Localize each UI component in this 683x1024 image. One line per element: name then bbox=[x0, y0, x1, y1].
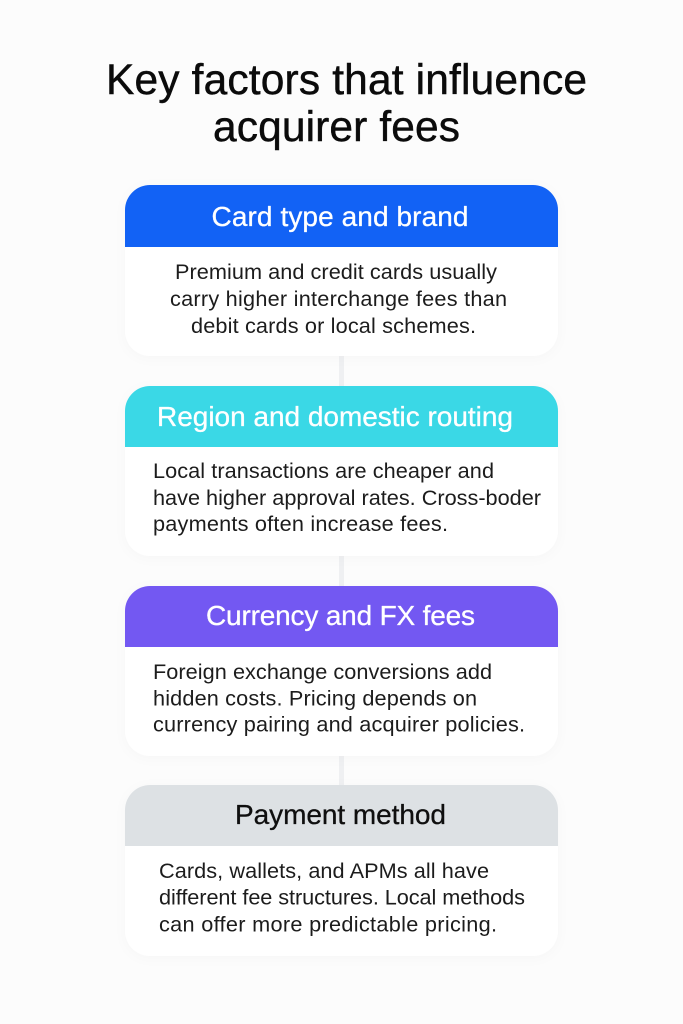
heading: currency and fx fees bbox=[125, 586, 558, 647]
text: region and domestic routing: have higher approval rates. Cross-boder bbox=[153, 485, 541, 510]
text: currency and fx fees: currency pairing and acquirer policies. bbox=[153, 712, 525, 736]
text: payment method bbox=[159, 858, 525, 936]
panel: currency and fx fees bbox=[125, 586, 558, 756]
heading: payment method bbox=[125, 785, 558, 846]
text: currency and fx fees: Foreign exchange conversions add bbox=[153, 659, 492, 684]
text: card type and brand: Premium and credit cards usually bbox=[175, 259, 497, 284]
title bbox=[106, 57, 587, 151]
title: acquirer fees bbox=[213, 104, 460, 151]
text: card type and brand bbox=[170, 259, 507, 338]
text: payment method: can offer more predictable pricing. bbox=[159, 912, 497, 936]
text: region and domestic routing: payments often increase fees. bbox=[153, 511, 448, 536]
heading: card type and brand bbox=[125, 185, 558, 247]
panel: region and domestic routing bbox=[125, 386, 558, 556]
connector 3 bbox=[339, 754, 344, 786]
connector 2 bbox=[339, 555, 344, 587]
heading: payment method: Payment method bbox=[235, 799, 446, 830]
panel: card type and brand bbox=[125, 185, 558, 356]
text: region and domestic routing: Local transactions are cheaper and bbox=[153, 458, 494, 483]
text: card type and brand: debit cards or local schemes. bbox=[191, 313, 476, 338]
title: Key factors that influence bbox=[106, 57, 587, 104]
text: card type and brand: carry higher interchange fees than bbox=[170, 286, 507, 311]
panel: payment method bbox=[125, 785, 558, 956]
text: currency and fx fees bbox=[153, 659, 525, 736]
text: payment method: Cards, wallets, and APMs all have bbox=[159, 858, 489, 883]
connector 1 bbox=[339, 355, 344, 387]
text: currency and fx fees: hidden costs. Pricing depends on bbox=[153, 686, 477, 710]
heading: region and domestic routing bbox=[125, 386, 558, 447]
heading: card type and brand: Card type and brand bbox=[212, 201, 468, 232]
text: payment method: different fee structures. Local methods bbox=[159, 884, 525, 910]
heading: currency and fx fees: Currency and FX fees bbox=[206, 600, 475, 631]
heading: region and domestic routing: Region and domestic routing bbox=[157, 401, 513, 432]
text: region and domestic routing bbox=[153, 458, 541, 536]
